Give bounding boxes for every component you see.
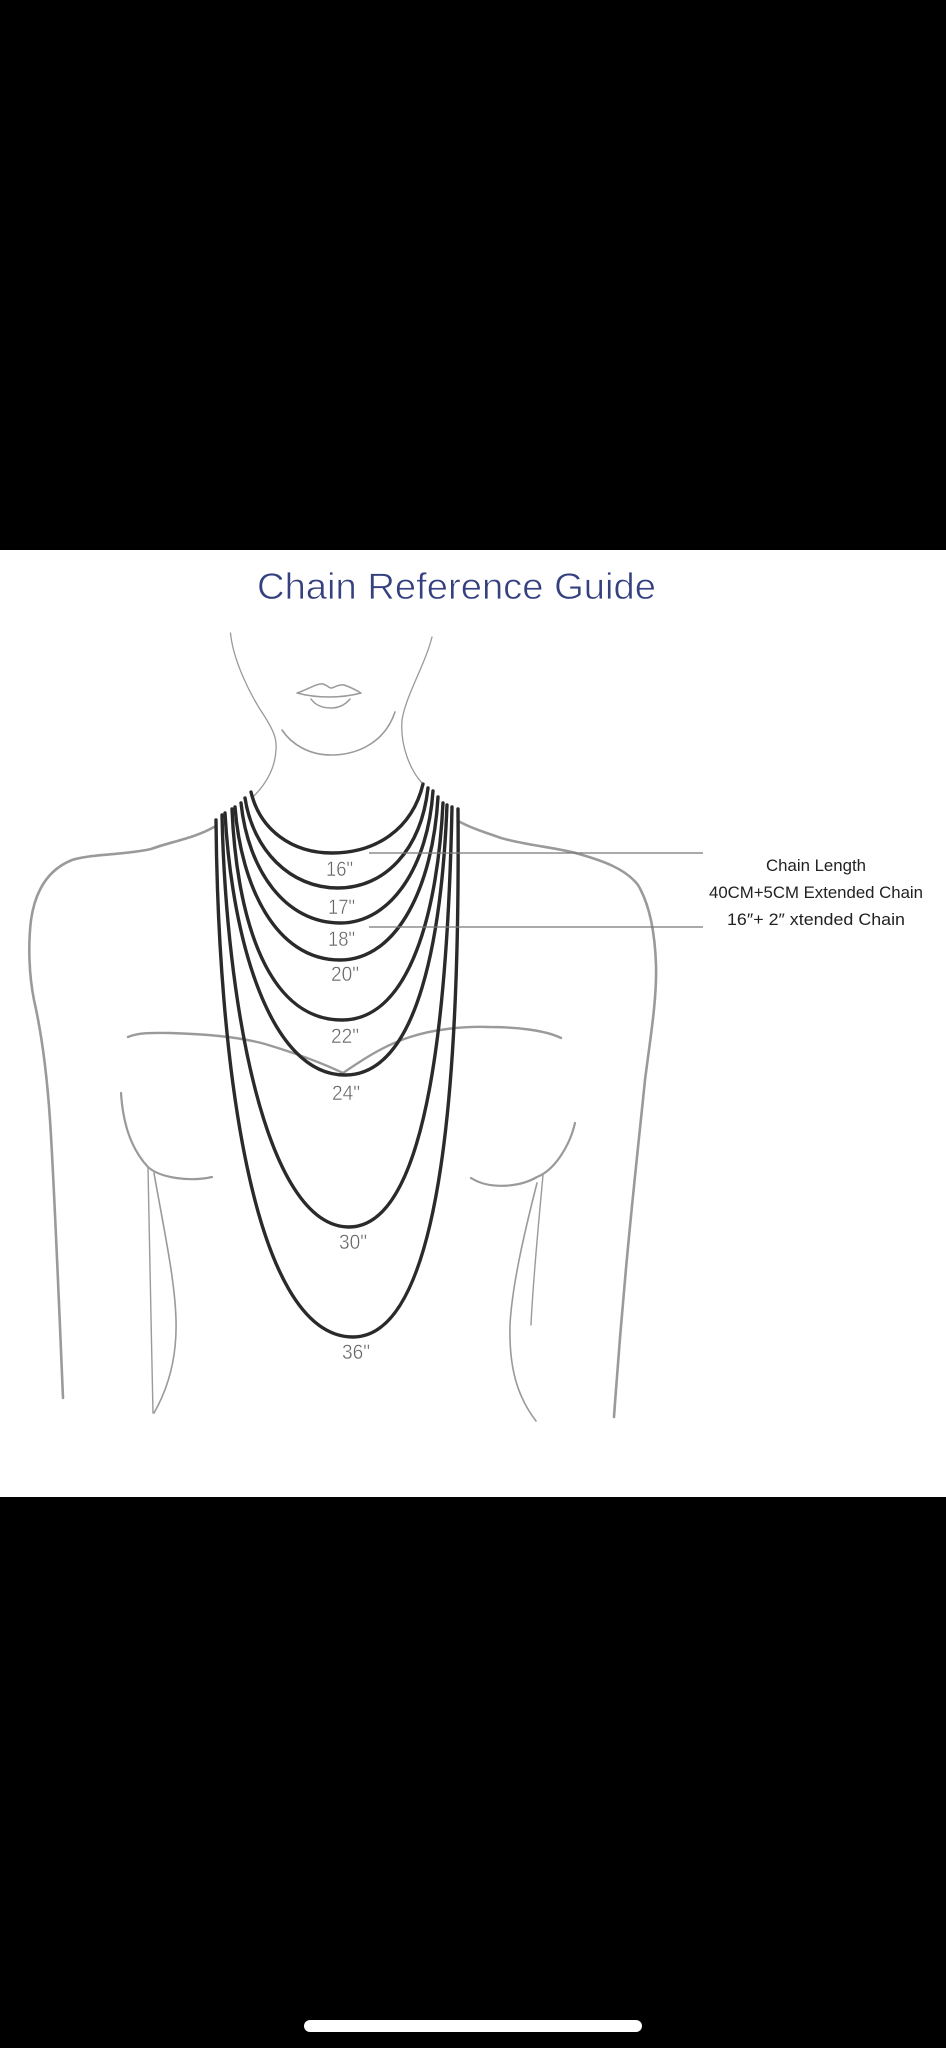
note line 3: 16″+ 2″ xtended Chain <box>727 910 905 929</box>
length labels <box>326 858 370 1364</box>
chains <box>216 784 458 1337</box>
label 24: 24" <box>332 1082 360 1105</box>
label 30: 30" <box>339 1231 367 1254</box>
left shoulder and arm <box>29 827 214 1398</box>
collar line <box>128 1027 561 1073</box>
note line 2: 40CM+5CM Extended Chain <box>709 883 923 902</box>
leader lines <box>369 853 703 927</box>
left bust <box>121 1093 212 1179</box>
label 16: 16" <box>326 858 353 881</box>
right shoulder and arm <box>460 822 656 1417</box>
body outline figure <box>29 633 656 1421</box>
lips <box>297 684 361 708</box>
note line 1: Chain Length <box>766 856 866 875</box>
right inner arm <box>531 1175 543 1325</box>
label 22: 22" <box>331 1025 359 1048</box>
right bust <box>471 1123 575 1186</box>
chain 17 inch <box>245 788 428 888</box>
chain length note <box>709 856 923 929</box>
chain 36 inch <box>216 809 458 1337</box>
label 20: 20" <box>331 963 359 986</box>
left inner arm <box>148 1168 153 1413</box>
panel: white guide image <box>0 550 946 1497</box>
face and neck left <box>230 633 276 797</box>
title: Chain Reference Guide <box>257 566 656 607</box>
chain 24 inch <box>225 805 447 1075</box>
label 18: 18" <box>328 928 355 951</box>
chin <box>282 712 395 755</box>
label 17: 17" <box>328 896 355 919</box>
chain 16 inch <box>251 784 423 853</box>
face and neck right <box>402 637 432 783</box>
home indicator <box>304 2020 642 2032</box>
chain 22 inch <box>232 803 443 1020</box>
chain 18 inch <box>241 791 433 923</box>
label 36: 36" <box>342 1341 370 1364</box>
chain 30 inch <box>222 807 452 1227</box>
chain 20 inch <box>235 797 438 960</box>
